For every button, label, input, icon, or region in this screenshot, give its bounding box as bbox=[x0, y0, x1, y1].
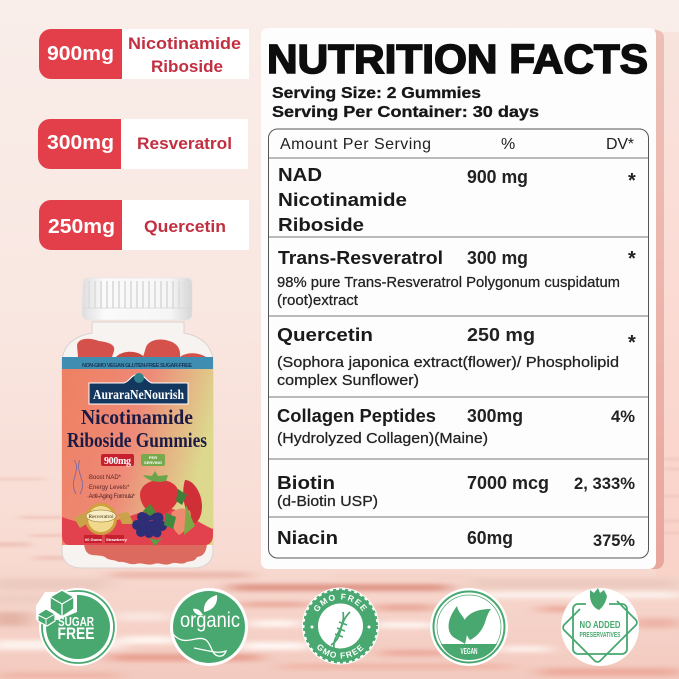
icon: organic badge bbox=[170, 588, 248, 666]
row: Collagen Peptides: 4% bbox=[611, 407, 635, 426]
row: Biotin: (d-Biotin USP) bbox=[277, 494, 378, 510]
table header bbox=[280, 136, 634, 153]
DNA strand on label bbox=[73, 460, 83, 494]
pack count pills bbox=[84, 535, 128, 543]
tag: 300mg Resveratrol: Resveratrol bbox=[137, 134, 232, 153]
row: Niacin: 60mg bbox=[467, 527, 513, 548]
row: Collagen Peptides: Collagen Peptides bbox=[277, 405, 436, 426]
pack count pills: 60 Gums bbox=[85, 537, 103, 542]
nutrition table bbox=[268, 129, 648, 558]
row: Quercetin bbox=[277, 324, 636, 389]
tag: 900mg Nicotinamide Riboside: Riboside bbox=[151, 57, 223, 76]
row: Biotin bbox=[277, 472, 635, 510]
benefit bullets: ·Energy Levels* bbox=[87, 485, 130, 491]
table header: % bbox=[501, 136, 515, 153]
row: Trans-Resveratrol: * bbox=[628, 248, 636, 270]
row: NAD bbox=[278, 164, 636, 235]
bottle label bbox=[62, 357, 213, 545]
icon: vegan badge bbox=[430, 588, 508, 666]
900mg per serving pill: 900mg bbox=[104, 456, 131, 467]
gummies inside bbox=[68, 339, 207, 565]
title: NUTRITION FACTS bbox=[267, 36, 648, 82]
table header: Amount Per Serving bbox=[280, 136, 431, 153]
row: NAD: 900 mg bbox=[467, 166, 528, 187]
benefit bullets: ·Boost NAD* bbox=[87, 475, 122, 481]
tag: 250mg Quercetin bbox=[39, 200, 249, 250]
product name bbox=[67, 405, 207, 452]
row: Niacin: 375% bbox=[593, 531, 635, 550]
row: Collagen Peptides bbox=[277, 405, 635, 447]
icon: GMO free badge: GMO FREE bbox=[314, 594, 368, 612]
tag: 250mg Quercetin: Quercetin bbox=[144, 217, 226, 236]
icon: sugar free badge: FREE bbox=[58, 624, 94, 643]
tag: 300mg Resveratrol: 300mg bbox=[47, 132, 114, 154]
row: Trans-Resveratrol: Trans-Resveratrol bbox=[278, 247, 443, 268]
900mg per serving pill: SERVING bbox=[144, 460, 162, 465]
gold seal: Resveratrol bbox=[88, 514, 114, 520]
row: Quercetin: * bbox=[628, 332, 636, 354]
serving info bbox=[272, 85, 539, 121]
tag: 300mg Resveratrol bbox=[38, 119, 248, 169]
row: NAD: Riboside bbox=[278, 214, 364, 235]
row: Collagen Peptides: (Hydrolyzed Collagen)(Maine) bbox=[277, 431, 488, 447]
row: Biotin: Biotin bbox=[277, 472, 335, 493]
icon: vegan badge: VEGAN bbox=[460, 647, 478, 656]
icon: sugar free badge bbox=[36, 588, 117, 666]
icon: GMO free badge: GMO FREE bbox=[317, 644, 364, 659]
icon: no added preservatives badge bbox=[561, 588, 639, 666]
bottle cap bbox=[82, 278, 192, 320]
label bottom red wave bbox=[62, 508, 213, 545]
row: Trans-Resveratrol bbox=[277, 247, 636, 309]
row: NAD: Nicotinamide bbox=[278, 189, 407, 210]
fruit illustration bbox=[132, 471, 202, 546]
icon: GMO free badge bbox=[302, 588, 379, 664]
row: Trans-Resveratrol: (root)extract bbox=[277, 293, 358, 309]
900mg per serving pill bbox=[101, 454, 165, 467]
row: Biotin: 2, 333% bbox=[574, 474, 635, 493]
icon: no added preservatives badge: PRESERVATIVES bbox=[580, 632, 621, 639]
row: Niacin bbox=[277, 527, 635, 550]
row: Trans-Resveratrol: 98% pure Trans-Resveratrol Polygonum cuspidatum bbox=[277, 275, 620, 291]
product name: Nicotinamide bbox=[81, 405, 193, 429]
panel: nutrition facts bbox=[261, 28, 656, 569]
product name: Riboside Gummies bbox=[67, 428, 207, 452]
brand logo bbox=[89, 373, 188, 404]
icon: no added preservatives badge: NO ADDED bbox=[580, 619, 621, 631]
row: Niacin: Niacin bbox=[277, 527, 338, 548]
900mg per serving pill: PER bbox=[149, 455, 157, 460]
row: Biotin: 7000 mcg bbox=[467, 472, 549, 493]
icon: organic badge: organic bbox=[180, 609, 240, 632]
table header: DV* bbox=[606, 136, 634, 153]
row: Quercetin: 250 mg bbox=[467, 324, 535, 345]
row: Quercetin: Quercetin bbox=[277, 324, 373, 345]
benefit bullets bbox=[87, 475, 136, 500]
row: Collagen Peptides: 300mg bbox=[467, 405, 523, 426]
row: Trans-Resveratrol: 300 mg bbox=[467, 247, 528, 268]
serving info: Serving Size: 2 Gummies bbox=[272, 85, 481, 102]
benefit bullets: ·Anti-Aging Formula* bbox=[87, 494, 136, 500]
serving info: Serving Per Container: 30 days bbox=[272, 104, 539, 121]
label top band bbox=[62, 357, 213, 369]
row: NAD: * bbox=[628, 170, 636, 192]
pack count pills: Strawberry bbox=[106, 537, 128, 542]
brand logo: AuraraNeNourish bbox=[93, 387, 184, 402]
tag: 900mg Nicotinamide Riboside: Nicotinamide bbox=[128, 34, 241, 53]
icon: sugar free badge: SUGAR bbox=[58, 615, 94, 629]
tag: 250mg Quercetin: 250mg bbox=[48, 216, 115, 238]
tag: 900mg Nicotinamide Riboside: 900mg bbox=[47, 43, 114, 65]
bottle body bbox=[62, 322, 213, 568]
product bottle bbox=[62, 278, 213, 568]
gold seal bbox=[74, 503, 134, 535]
row: Quercetin: (Sophora japonica extract(flower)/ Phospholipid bbox=[277, 355, 619, 371]
band claims: NON-GMO VEGAN GLUTEN-FREE SUGAR-FREE bbox=[82, 363, 192, 369]
tag: 900mg Nicotinamide Riboside bbox=[39, 29, 249, 79]
row: Quercetin: complex Sunflower) bbox=[277, 373, 419, 389]
row: NAD: NAD bbox=[278, 164, 322, 185]
